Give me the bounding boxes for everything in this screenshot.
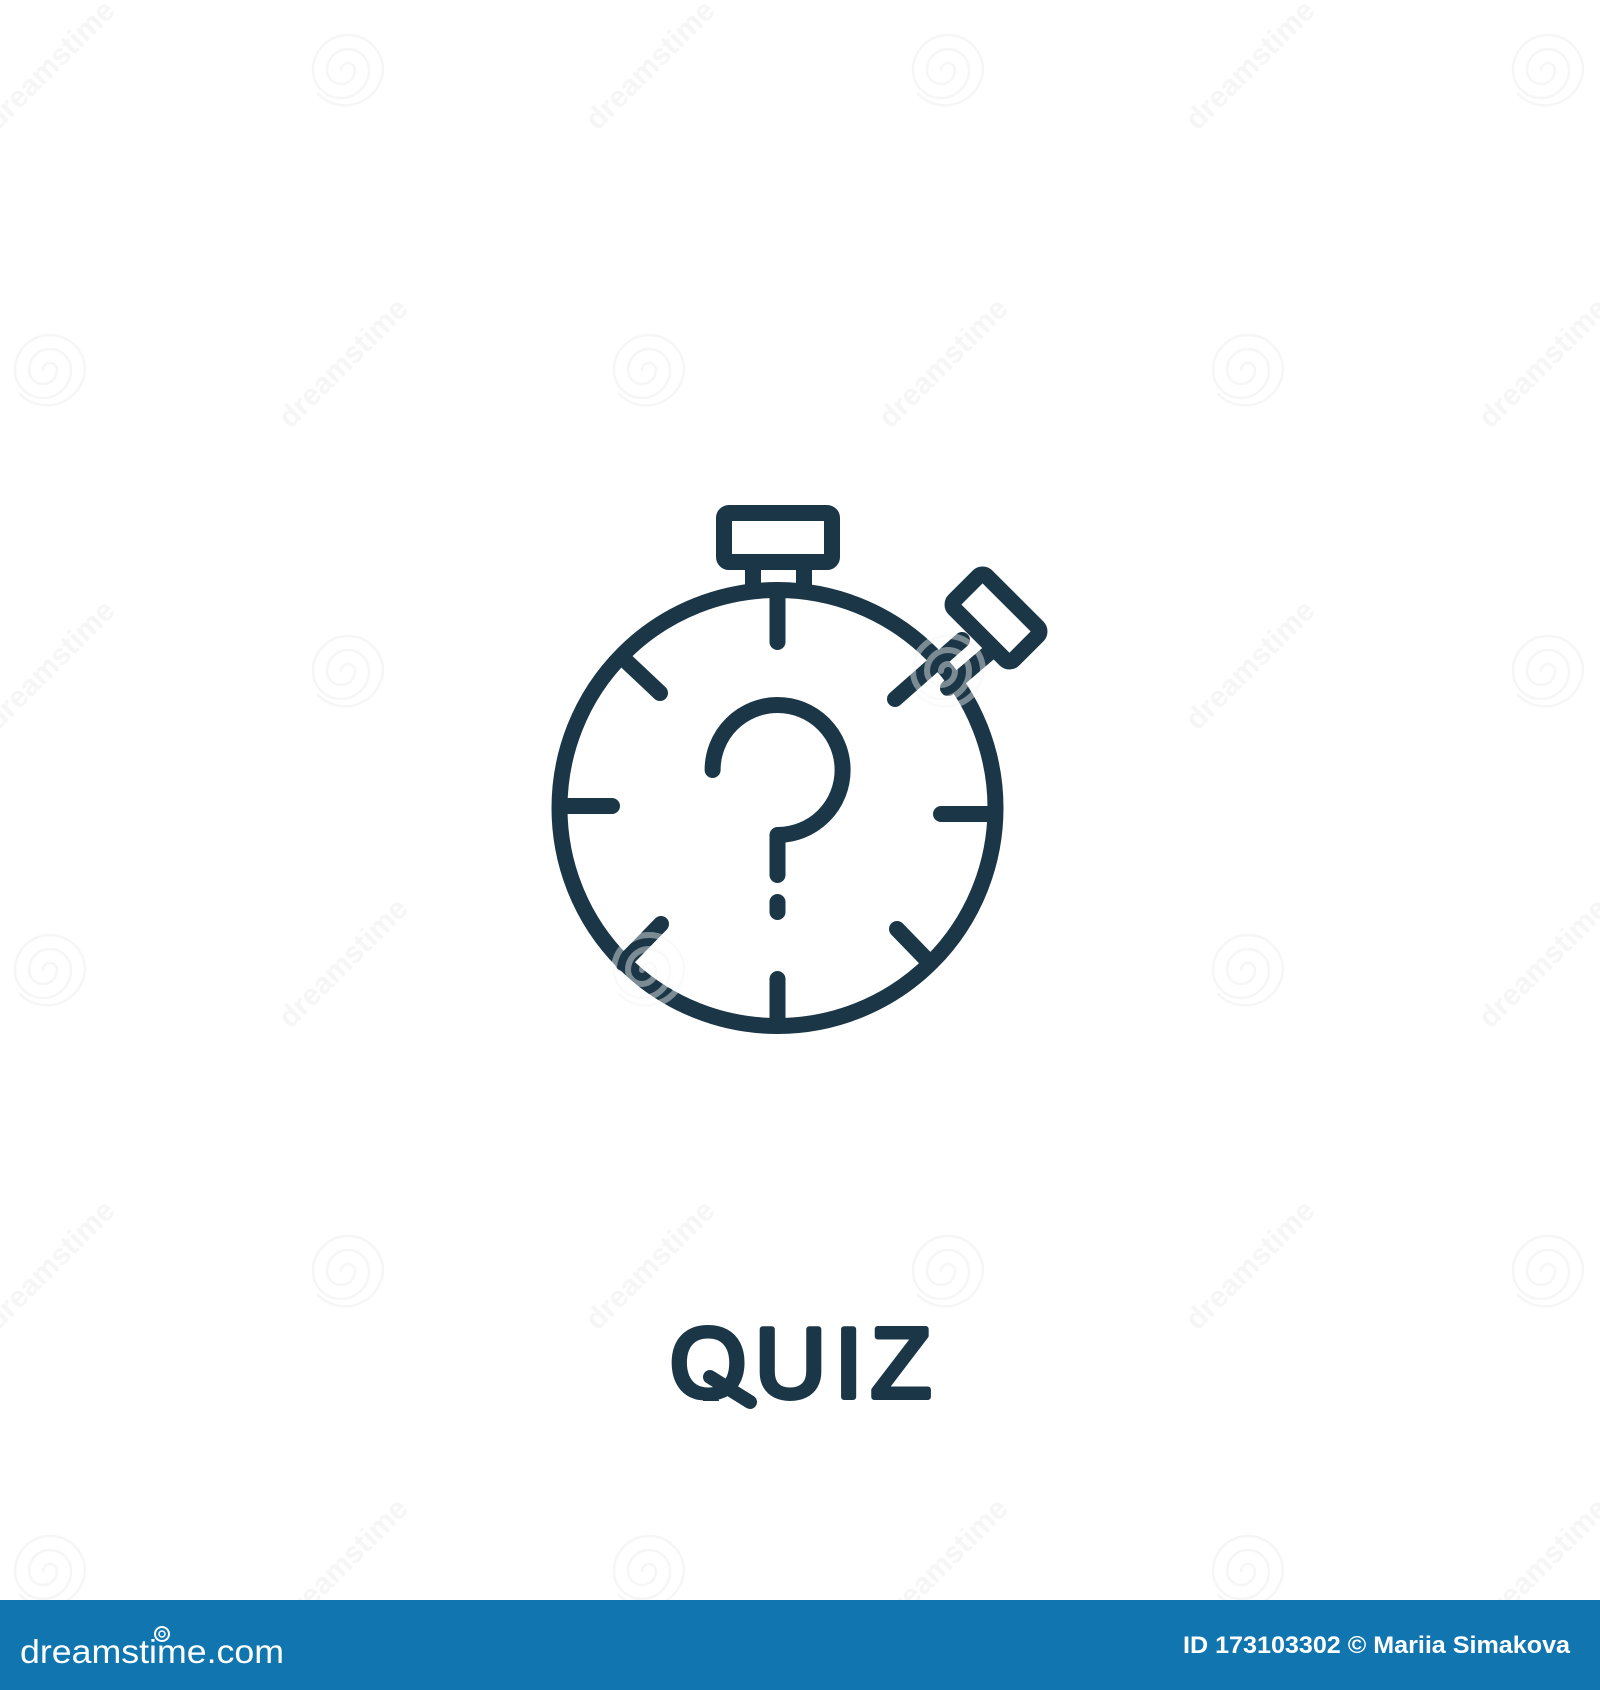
footer logo: dreamstime.com: dreamstime.com: [20, 1633, 284, 1670]
watermark pattern: dreamstime: [1179, 594, 1321, 736]
watermark overlay on icon: [614, 636, 983, 1005]
side pusher button: [895, 572, 1042, 699]
footer credit: ID 173103302 © Mariia Simakova: [1183, 1632, 1571, 1659]
question mark: [713, 705, 843, 912]
watermark pattern: dreamstime: [1179, 1194, 1321, 1336]
dial tick marks: [566, 590, 990, 1026]
watermark pattern: dreamstime: [579, 1194, 721, 1336]
footer bar: [0, 1600, 1600, 1690]
watermark pattern: dreamstime: [872, 292, 1014, 434]
stopwatch dial ring: [560, 590, 996, 1026]
watermark pattern: dreamstime: [272, 292, 414, 434]
watermark pattern: dreamstime: [272, 1492, 414, 1634]
title: QUIZ: QUIZ: [670, 1308, 940, 1418]
watermark pattern: dreamstime: [872, 1492, 1014, 1634]
watermark pattern: dreamstime: [272, 892, 414, 1034]
icon: stopwatch with question mark: [560, 513, 1042, 1026]
top crown button: [724, 513, 832, 588]
